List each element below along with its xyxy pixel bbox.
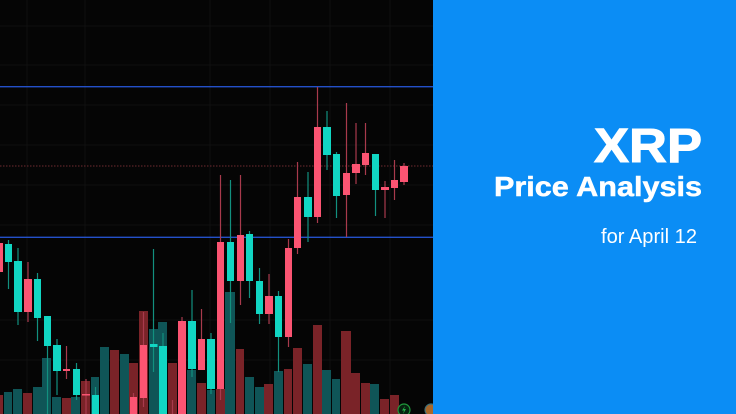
chart: XRP candlestick chart (0, 86, 437, 414)
candle bodies: bearish (0, 127, 408, 414)
panel: blue title panel (433, 0, 736, 414)
title: XRP: XRP (594, 120, 702, 173)
icon: orange badge (425, 404, 437, 414)
candle bodies: bullish (5, 127, 379, 414)
candle wicks (8, 87, 404, 414)
price level lines (0, 86, 433, 238)
heading: Price Analysis: Price Analysis (494, 171, 702, 202)
volume bars (0, 292, 399, 414)
icon: green lightning badge (398, 404, 410, 414)
subheading: date: for April 12 (601, 226, 697, 248)
